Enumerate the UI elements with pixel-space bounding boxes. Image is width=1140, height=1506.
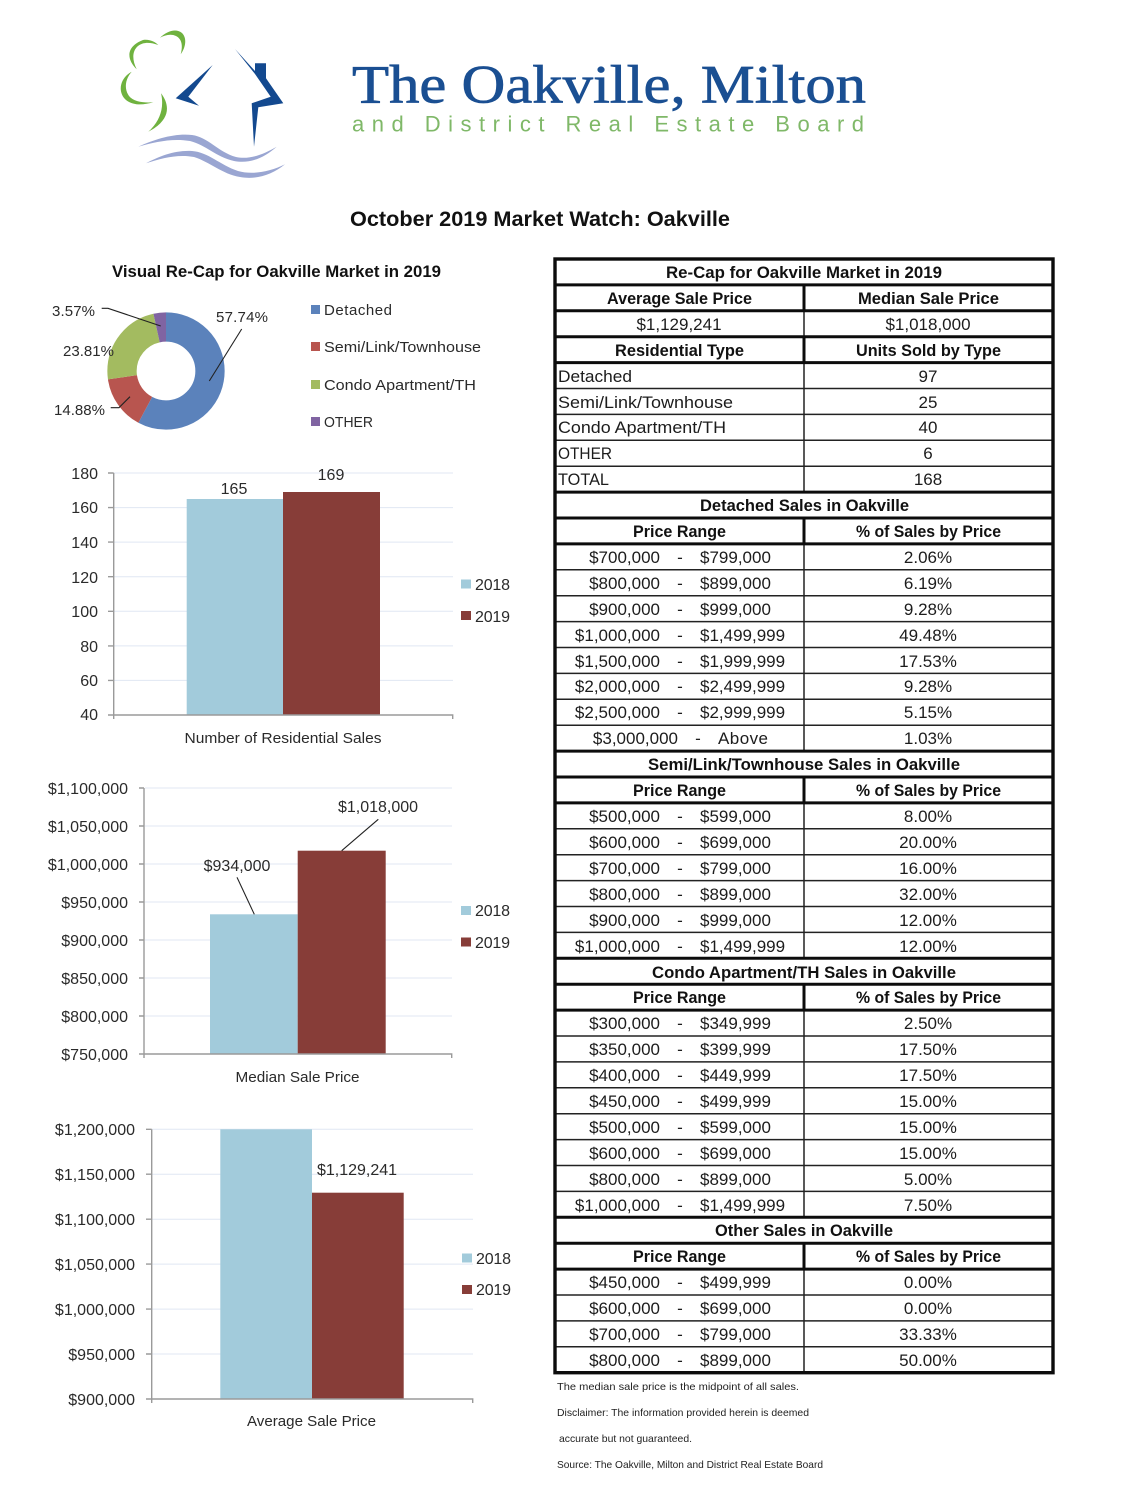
y axis labels: $750,000 (61, 1047, 128, 1064)
bar: 2018 median (210, 914, 298, 1054)
y axis labels: 60 (80, 673, 98, 690)
section: detached sales: $1,000,000 (575, 626, 660, 645)
section: semi/link/townhouse sales: Semi/Link/Townhouse Sales in Oakville (648, 755, 960, 774)
section: summary prices: $1,129,241 (636, 315, 722, 334)
y axis labels: $800,000 (61, 1009, 128, 1026)
section: other sales: - (677, 1273, 683, 1292)
section: units sold by type: 40 (919, 418, 937, 437)
section: detached sales: 49.48% (899, 626, 957, 645)
section: condo apartment/TH sales: $499,999 (700, 1092, 771, 1111)
section: units sold by type: 168 (914, 470, 942, 489)
legend (462, 1251, 511, 1299)
logo: The Oakville, Milton and District Real Estate Board (121, 31, 866, 178)
panel: recap table (555, 259, 1053, 1373)
section: units sold by type: Residential Type (615, 341, 744, 360)
section: units sold by type: 6 (923, 444, 933, 463)
section: semi/link/townhouse sales: $999,000 (700, 911, 771, 930)
section: condo apartment/TH sales: - (677, 1196, 683, 1215)
legend (461, 577, 510, 626)
section: condo apartment/TH sales: $450,000 (589, 1092, 660, 1111)
y axis labels: 140 (71, 535, 98, 552)
section: detached sales: - (677, 652, 683, 671)
section: semi/link/townhouse sales: $600,000 (589, 833, 660, 852)
section: condo apartment/TH sales: Condo Apartment/TH Sales in Oakville (652, 963, 956, 982)
section: detached sales: $2,499,999 (700, 677, 785, 696)
y axis labels: $950,000 (68, 1347, 135, 1364)
section: detached sales: % of Sales by Price (856, 522, 1001, 541)
section: detached sales: $2,500,000 (575, 703, 660, 722)
y axis labels: $900,000 (68, 1392, 135, 1409)
y axis labels: $1,000,000 (48, 857, 128, 874)
section: other sales: 50.00% (899, 1351, 957, 1370)
section: other sales: % of Sales by Price (856, 1247, 1001, 1266)
section: condo apartment/TH sales: - (677, 1014, 683, 1033)
bar chart: average sale price (55, 1122, 511, 1430)
section: condo apartment/TH sales: - (677, 1118, 683, 1137)
section: detached sales: $700,000 (589, 548, 660, 567)
donut chart (122, 327, 210, 415)
section: units sold by type: Units Sold by Type (856, 341, 1001, 360)
section: detached sales: Price Range (633, 522, 726, 541)
logo heading: The Oakville, Milton (352, 54, 866, 114)
y axis labels: $900,000 (61, 933, 128, 950)
section: summary prices: Average Sale Price (607, 289, 752, 308)
section: condo apartment/TH sales: $599,000 (700, 1118, 771, 1137)
y axis labels: 100 (71, 604, 98, 621)
axis title: Average Sale Price (247, 1413, 376, 1430)
footnotes and disclaimer: Disclaimer: The information provided herein is deemed (557, 1407, 809, 1419)
section: semi/link/townhouse sales: - (677, 807, 683, 826)
section: semi/link/townhouse sales: $1,000,000 (575, 937, 660, 956)
section: summary prices (607, 263, 999, 334)
section: detached sales: $800,000 (589, 574, 660, 593)
legend: 2019 (476, 1282, 511, 1299)
section: units sold by type: Condo Apartment/TH (558, 418, 726, 437)
section: semi/link/townhouse sales: $899,000 (700, 885, 771, 904)
section: detached sales: $3,000,000 (593, 729, 678, 748)
section: semi/link/townhouse sales: - (677, 885, 683, 904)
section: semi/link/townhouse sales: 8.00% (904, 807, 952, 826)
section: summary prices: Re-Cap for Oakville Market in 2019 (666, 263, 942, 282)
section: condo apartment/TH sales: $400,000 (589, 1066, 660, 1085)
section: semi/link/townhouse sales: 16.00% (899, 859, 957, 878)
y axis labels: $1,000,000 (55, 1302, 135, 1319)
value labels with leaders: $1,018,000 (338, 799, 418, 816)
y axis labels: 180 (71, 466, 98, 483)
section: semi/link/townhouse sales (575, 755, 1001, 956)
legend (461, 903, 510, 952)
section: semi/link/townhouse sales: $800,000 (589, 885, 660, 904)
section: summary prices: Median Sale Price (858, 289, 999, 308)
section: detached sales: Detached Sales in Oakville (700, 496, 909, 515)
donut legend: Detached (324, 302, 392, 319)
value labels: 165 (221, 481, 247, 498)
section: condo apartment/TH sales: - (677, 1092, 683, 1111)
section: semi/link/townhouse sales: 12.00% (899, 937, 957, 956)
footnotes and disclaimer (557, 1381, 823, 1471)
donut labels (52, 303, 268, 419)
section: summary prices: $1,018,000 (885, 315, 971, 334)
y axis labels: $1,150,000 (55, 1167, 135, 1184)
y axis labels: $850,000 (61, 971, 128, 988)
section: condo apartment/TH sales: 17.50% (899, 1040, 957, 1059)
section: semi/link/townhouse sales: Price Range (633, 781, 726, 800)
section: semi/link/townhouse sales: 32.00% (899, 885, 957, 904)
bar: 2019 average (312, 1193, 404, 1399)
bar: 2019 median (298, 851, 386, 1054)
donut legend (311, 302, 481, 431)
footnotes and disclaimer: The median sale price is the midpoint of all sales. (557, 1381, 799, 1393)
section: condo apartment/TH sales: - (677, 1040, 683, 1059)
section: condo apartment/TH sales: $349,999 (700, 1014, 771, 1033)
section: semi/link/townhouse sales: $699,000 (700, 833, 771, 852)
section: other sales: 0.00% (904, 1299, 952, 1318)
y axis labels: $1,050,000 (55, 1257, 135, 1274)
section: other sales: 33.33% (899, 1325, 957, 1344)
section: detached sales: - (677, 548, 683, 567)
section: detached sales: 2.06% (904, 548, 952, 567)
y axis labels: $1,200,000 (55, 1122, 135, 1139)
y axis labels: $1,100,000 (48, 781, 128, 798)
section: detached sales: 9.28% (904, 677, 952, 696)
section: detached sales: $2,999,999 (700, 703, 785, 722)
section: condo apartment/TH sales: - (677, 1144, 683, 1163)
legend: 2019 (475, 935, 510, 952)
section: detached sales: - (677, 600, 683, 619)
footnotes and disclaimer: Source: The Oakville, Milton and District Real Estate Board (557, 1459, 823, 1471)
section: semi/link/townhouse sales: $1,499,999 (700, 937, 785, 956)
section: other sales: $499,999 (700, 1273, 771, 1292)
y axis labels (48, 781, 128, 1064)
section: semi/link/townhouse sales: $900,000 (589, 911, 660, 930)
section: semi/link/townhouse sales: $700,000 (589, 859, 660, 878)
section: detached sales: $799,000 (700, 548, 771, 567)
bar chart: number of residential sales (71, 466, 510, 747)
axis title: Number of Residential Sales (184, 730, 382, 747)
bar: 2018 average (220, 1129, 312, 1399)
y axis labels: 80 (80, 639, 98, 656)
donut labels: 14.88% (54, 402, 105, 419)
section: detached sales: - (677, 574, 683, 593)
y axis labels: 120 (71, 570, 98, 587)
section: semi/link/townhouse sales: $599,000 (700, 807, 771, 826)
y axis labels: 40 (80, 707, 98, 724)
section: detached sales: 9.28% (904, 600, 952, 619)
section: detached sales: $1,499,999 (700, 626, 785, 645)
section: detached sales (575, 496, 1001, 748)
value labels (221, 467, 344, 498)
section: detached sales: $1,999,999 (700, 652, 785, 671)
section: semi/link/townhouse sales: - (677, 833, 683, 852)
section: detached sales: - (677, 677, 683, 696)
section: condo apartment/TH sales: $1,499,999 (700, 1196, 785, 1215)
bar: 2018 sales (187, 499, 283, 715)
section: condo apartment/TH sales: % of Sales by Price (856, 988, 1001, 1007)
section: other sales: - (677, 1325, 683, 1344)
section: other sales: Price Range (633, 1247, 726, 1266)
section: semi/link/townhouse sales: % of Sales by Price (856, 781, 1001, 800)
legend: 2019 (475, 609, 510, 626)
section: units sold by type: Semi/Link/Townhouse (558, 393, 733, 412)
section: detached sales: 5.15% (904, 703, 952, 722)
section: detached sales: 6.19% (904, 574, 952, 593)
section: condo apartment/TH sales: 17.50% (899, 1066, 957, 1085)
donut legend: Condo Apartment/TH (324, 377, 476, 394)
section: detached sales: $900,000 (589, 600, 660, 619)
y axis labels: $1,050,000 (48, 819, 128, 836)
section: condo apartment/TH sales: Price Range (633, 988, 726, 1007)
section: condo apartment/TH sales: $600,000 (589, 1144, 660, 1163)
donut legend: Semi/Link/Townhouse (324, 339, 481, 356)
legend: 2018 (475, 577, 510, 594)
section: condo apartment/TH sales: - (677, 1170, 683, 1189)
section: semi/link/townhouse sales: 12.00% (899, 911, 957, 930)
section: condo apartment/TH sales: $899,000 (700, 1170, 771, 1189)
donut legend: OTHER (324, 414, 373, 431)
section: condo apartment/TH sales: $350,000 (589, 1040, 660, 1059)
section: other sales: - (677, 1299, 683, 1318)
y axis labels (71, 466, 98, 724)
y axis labels: $1,100,000 (55, 1212, 135, 1229)
section: condo apartment/TH sales: 15.00% (899, 1118, 957, 1137)
section: condo apartment/TH sales: $500,000 (589, 1118, 660, 1137)
section: other sales: $699,000 (700, 1299, 771, 1318)
donut leader lines (102, 308, 242, 408)
legend: 2018 (476, 1251, 511, 1268)
section: condo apartment/TH sales (575, 963, 1001, 1215)
icon: green tree outline (121, 31, 185, 132)
section: detached sales: Above (718, 729, 768, 748)
section: other sales: $799,000 (700, 1325, 771, 1344)
section: other sales: $700,000 (589, 1325, 660, 1344)
donut labels: 23.81% (63, 343, 114, 360)
section: condo apartment/TH sales: $1,000,000 (575, 1196, 660, 1215)
section: semi/link/townhouse sales: 20.00% (899, 833, 957, 852)
panel: donut chart recap (52, 262, 481, 431)
section: condo apartment/TH sales: 5.00% (904, 1170, 952, 1189)
value labels: 169 (318, 467, 344, 484)
section: condo apartment/TH sales: $800,000 (589, 1170, 660, 1189)
section: units sold by type: 25 (919, 393, 937, 412)
section: other sales: $899,000 (700, 1351, 771, 1370)
table grid (555, 259, 1053, 1373)
section: semi/link/townhouse sales: - (677, 859, 683, 878)
section: detached sales: $2,000,000 (575, 677, 660, 696)
value label: $1,129,241 (317, 1162, 397, 1179)
section: condo apartment/TH sales: $449,999 (700, 1066, 771, 1085)
section: detached sales: - (677, 626, 683, 645)
y axis labels (55, 1122, 135, 1409)
section: units sold by type: 97 (919, 367, 937, 386)
section: other sales: $800,000 (589, 1351, 660, 1370)
section: condo apartment/TH sales: $399,999 (700, 1040, 771, 1059)
icon: purple water waves (138, 135, 285, 178)
section: semi/link/townhouse sales: - (677, 911, 683, 930)
bar: 2019 sales (283, 492, 380, 715)
donut labels: 3.57% (52, 303, 95, 320)
value labels with leaders: $934,000 (204, 858, 270, 875)
section: other sales: - (677, 1351, 683, 1370)
section: detached sales: - (677, 703, 683, 722)
section: other sales: Other Sales in Oakville (715, 1221, 893, 1240)
section: detached sales: - (695, 729, 701, 748)
logo subheading: and District Real Estate Board (352, 112, 864, 136)
section: other sales: 0.00% (904, 1273, 952, 1292)
section: detached sales: $999,000 (700, 600, 771, 619)
section: semi/link/townhouse sales: $500,000 (589, 807, 660, 826)
donut heading: Visual Re-Cap for Oakville Market in 2019 (112, 262, 441, 281)
section: units sold by type (558, 341, 1001, 489)
footnotes and disclaimer: accurate but not guaranteed. (559, 1433, 692, 1445)
section: condo apartment/TH sales: 2.50% (904, 1014, 952, 1033)
section: units sold by type: Detached (558, 367, 632, 386)
section: units sold by type: TOTAL (558, 470, 609, 489)
axis title: Median Sale Price (236, 1069, 360, 1086)
section: detached sales: $1,500,000 (575, 652, 660, 671)
title: October 2019 Market Watch: Oakville (350, 208, 730, 231)
bar chart: median sale price (48, 781, 510, 1086)
y axis labels: $950,000 (61, 895, 128, 912)
section: condo apartment/TH sales: - (677, 1066, 683, 1085)
section: condo apartment/TH sales: $300,000 (589, 1014, 660, 1033)
section: other sales: $450,000 (589, 1273, 660, 1292)
section: detached sales: $899,000 (700, 574, 771, 593)
section: condo apartment/TH sales: 15.00% (899, 1144, 957, 1163)
y axis labels: 160 (71, 500, 98, 517)
section: semi/link/townhouse sales: - (677, 937, 683, 956)
section: condo apartment/TH sales: $699,000 (700, 1144, 771, 1163)
section: other sales (589, 1221, 1001, 1370)
section: condo apartment/TH sales: 15.00% (899, 1092, 957, 1111)
section: units sold by type: OTHER (558, 444, 612, 463)
section: detached sales: 17.53% (899, 652, 957, 671)
section: semi/link/townhouse sales: $799,000 (700, 859, 771, 878)
donut labels: 57.74% (216, 309, 268, 326)
icon: blue house roof (176, 49, 283, 147)
legend: 2018 (475, 903, 510, 920)
section: condo apartment/TH sales: 7.50% (904, 1196, 952, 1215)
value labels with leaders (204, 799, 418, 914)
section: detached sales: 1.03% (904, 729, 952, 748)
section: other sales: $600,000 (589, 1299, 660, 1318)
